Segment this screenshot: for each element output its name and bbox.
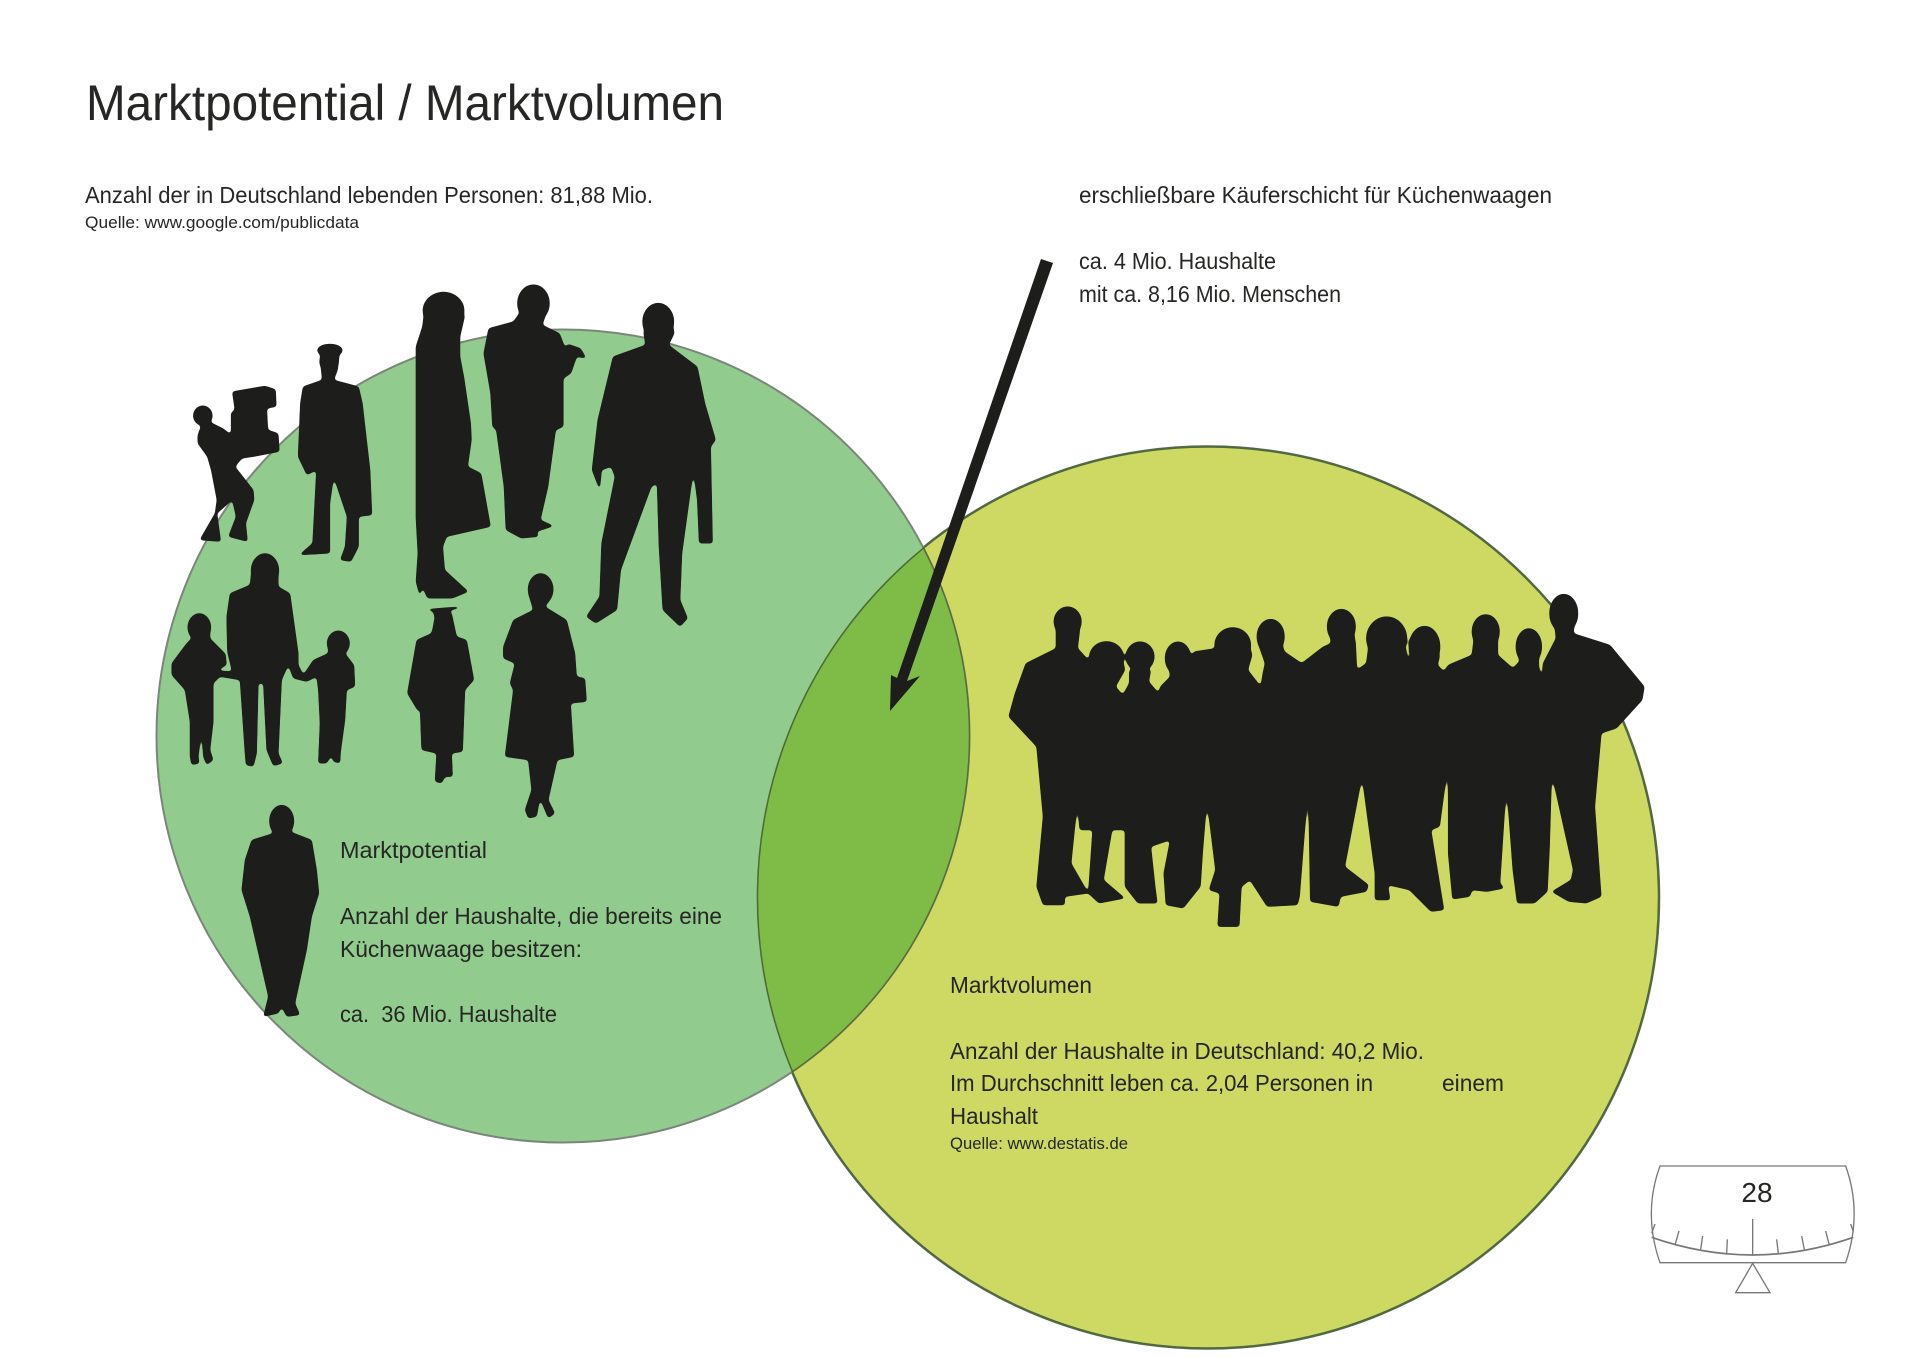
page number scale icon: 28: [1741, 1177, 1773, 1208]
people silhouettes: group Marktvolumen: [1009, 594, 1644, 927]
text block: target buyers: mit ca. 8,16 Mio. Menschen: [1079, 281, 1341, 307]
venn diagram: [156, 330, 1660, 1349]
silhouette: man carrying boxes: [193, 386, 279, 542]
circle: Marktvolumen: [756, 446, 1660, 1349]
text block: Marktvolumen: Im Durchschnitt leben ca. 2,04 Personen in: [950, 1070, 1373, 1096]
silhouette: man with cigar: [484, 285, 586, 538]
silhouette: worker with tube: [586, 303, 716, 627]
silhouette: tall woman with handbag: [416, 292, 491, 598]
text block: Marktpotential: ca. 36 Mio. Haushalte: [340, 1001, 557, 1027]
title: Marktpotential / Marktvolumen: [86, 75, 724, 131]
text block: population: [85, 182, 653, 232]
text block: population: Anzahl der in Deutschland lebenden Personen: 81,88 Mio.: [85, 182, 653, 208]
text block: Marktvolumen: [950, 972, 1504, 1153]
people silhouettes: Marktpotential: [172, 285, 716, 1017]
text block: Marktvolumen: Haushalt: [950, 1103, 1039, 1129]
text block: Marktpotential: Küchenwaage besitzen:: [340, 936, 582, 962]
text block: Marktvolumen: einem: [1442, 1070, 1504, 1096]
text block: population: Quelle: www.google.com/publicdata: [85, 214, 360, 232]
text block: Marktvolumen: Anzahl der Haushalte in Deutschland: 40,2 Mio.: [950, 1038, 1424, 1064]
circle: Marktpotential: [156, 330, 970, 1142]
text block: target buyers: [1079, 182, 1552, 307]
silhouette: woman with purse: [503, 573, 587, 818]
text block: Marktpotential: Marktpotential: [340, 837, 487, 863]
overlap: erschließbare Käuferschicht: [756, 446, 1660, 1349]
text block: Marktpotential: [340, 837, 722, 1027]
text block: Marktvolumen: Marktvolumen: [950, 972, 1092, 998]
arrow: [890, 259, 1053, 711]
silhouette: man standing: [242, 805, 319, 1017]
page number scale icon: [1651, 1166, 1854, 1293]
silhouette: graduate: [407, 607, 474, 783]
text block: Marktpotential: Anzahl der Haushalte, die bereits eine: [340, 903, 722, 929]
text block: target buyers: erschließbare Käuferschicht für Küchenwaagen: [1079, 182, 1552, 208]
silhouette: man in uniform with briefcase: [298, 344, 372, 562]
text block: target buyers: ca. 4 Mio. Haushalte: [1079, 248, 1276, 274]
silhouette: mother with two children: [172, 553, 355, 767]
text block: Marktvolumen: Quelle: www.destatis.de: [950, 1135, 1128, 1153]
